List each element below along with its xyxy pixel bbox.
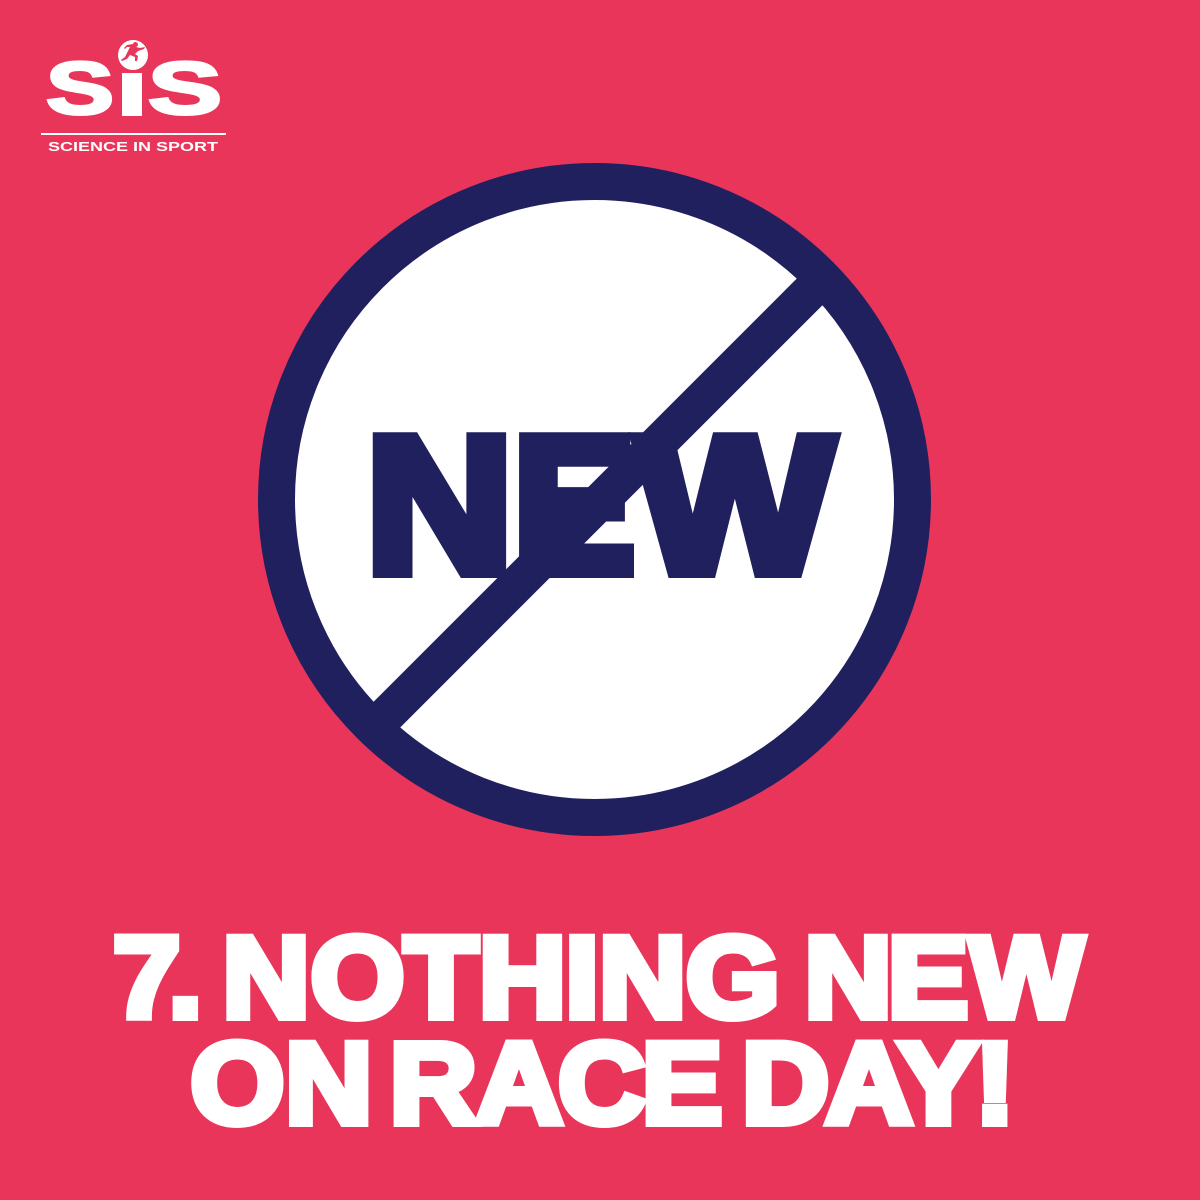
title line 2: ON RACE DAY!: [191, 1019, 1015, 1147]
logo wordmark: S: [148, 47, 222, 130]
title line 1: 7. NOTHING NEW: [113, 913, 1084, 1041]
logo: SiS Science in Sport: [41, 40, 226, 154]
logo wordmark: [46, 47, 222, 130]
word NEW: N: [366, 396, 513, 612]
title: [113, 913, 1084, 1147]
logo letter i: [122, 73, 142, 116]
word NEW: W: [637, 396, 833, 612]
logo wordmark: S: [46, 47, 114, 130]
slash: [380, 284, 817, 722]
sign disc: [276, 182, 912, 818]
word NEW: E: [513, 396, 635, 612]
icon: prohibition sign over NEW: [276, 182, 912, 818]
word NEW: [366, 396, 833, 612]
icon: runner in circle: [118, 40, 148, 70]
logo rule: [41, 133, 226, 135]
logo tagline: SCIENCE IN SPORT: [48, 140, 219, 154]
